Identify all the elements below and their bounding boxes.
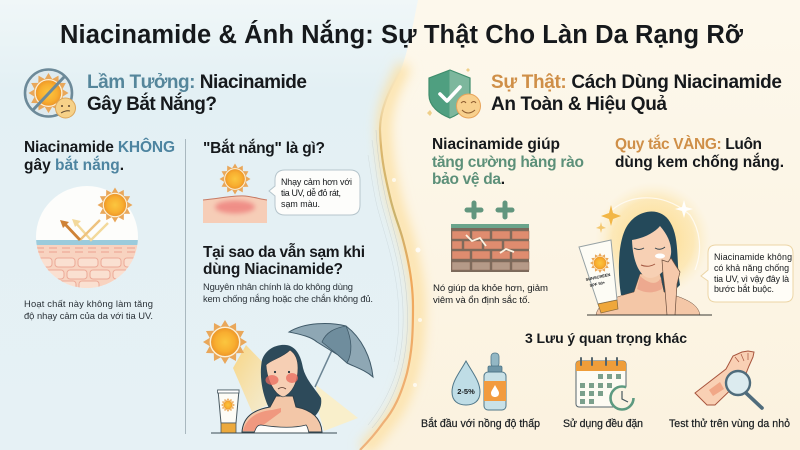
- text: cause: Nguyên nhân chính là do không dùng: [203, 281, 353, 292]
- panel: what is photosensitivity: [203, 139, 373, 433]
- text: explanation: [24, 298, 153, 321]
- icon: shield with smile: [427, 68, 480, 118]
- decorative golden wave divider: [360, 65, 422, 450]
- heading: why skin darkens: Tại sao da vẫn sạm khi: [203, 244, 365, 261]
- label: Bắt đầu với nồng độ thấp: [421, 417, 540, 430]
- text: cause: [203, 281, 373, 304]
- title: Niacinamide & Ánh Nắng: Sự Thật Cho Làn Da Rạng Rỡ: [60, 19, 744, 49]
- illustration: woman applying sunscreen: [579, 182, 712, 315]
- icon: drop and serum bottle: 2-5%: [457, 387, 475, 396]
- label: Test thử trên vùng da nhỏ: [669, 418, 790, 430]
- hand: [662, 258, 680, 315]
- illustration: sunburned woman with broken umbrella: [203, 320, 373, 433]
- truth heading: Sự Thật: Cách Dùng Niacinamide: [491, 72, 782, 93]
- face: [266, 350, 298, 397]
- umbrella: [289, 324, 373, 387]
- heading: why skin darkens: [203, 244, 365, 278]
- myth heading: [87, 72, 307, 115]
- callout: definition: sạm màu.: [281, 199, 320, 209]
- column divider: [184, 139, 186, 434]
- text: barrier benefit: Nó giúp da khỏe hơn, giảm: [433, 283, 548, 294]
- claim heading: Niacinamide KHÔNG: [24, 138, 175, 156]
- text: cause: kem chống nắng hoặc che chắn không đủ.: [203, 293, 373, 304]
- barrier heading: Niacinamide giúp: [432, 136, 560, 153]
- hair back: [261, 345, 321, 423]
- heading: "Bắt nắng" là gì?: [203, 139, 325, 157]
- barrier heading: tăng cường hàng rào: [432, 154, 584, 171]
- callout: definition: tia UV, dễ đỏ rát,: [281, 188, 341, 198]
- callout: definition: Nhạy cảm hơn với: [281, 177, 352, 187]
- heading: three notes: 3 Lưu ý quan trọng khác: [525, 330, 687, 346]
- myth heading: Gây Bắt Nắng?: [87, 93, 217, 115]
- golden rule heading: [615, 135, 784, 171]
- callout: sunscreen required: Niacinamide không: [714, 252, 792, 262]
- icon: calendar with clock: [576, 358, 634, 410]
- claim heading: gây bắt nắng.: [24, 156, 124, 174]
- text: explanation: Hoạt chất này không làm tăng: [24, 298, 153, 309]
- sunscreen tube: SUNSCREEN: [585, 272, 611, 282]
- icon: crossed-out sun with worried face: [25, 70, 76, 118]
- body: [596, 274, 700, 315]
- label: Sử dụng đều đặn: [563, 418, 643, 430]
- text: barrier benefit: viêm và ổn định sắc tố.: [433, 295, 530, 306]
- panel: truth: [421, 68, 793, 430]
- heading: why skin darkens: dùng Niacinamide?: [203, 261, 343, 278]
- callout: sunscreen required: có khả năng chống: [714, 263, 789, 273]
- text: explanation: độ nhạy cảm của da với tia UV.: [24, 310, 153, 321]
- callout: sunscreen required: tia UV, vì vậy đây là: [714, 274, 789, 284]
- body: [242, 396, 322, 432]
- golden rule heading: Quy tắc VÀNG: Luôn: [615, 135, 762, 153]
- truth heading: [491, 72, 782, 115]
- callout: definition: [269, 170, 360, 215]
- towel: [254, 425, 309, 433]
- hair: [619, 212, 680, 295]
- myth heading: Lầm Tưởng: Niacinamide: [87, 72, 307, 93]
- callout: sunscreen required: bước bắt buộc.: [714, 284, 774, 294]
- text: barrier benefit: [433, 283, 548, 306]
- truth heading: An Toàn & Hiệu Quả: [491, 94, 667, 115]
- claim heading: [24, 138, 175, 174]
- golden rule heading: dùng kem chống nắng.: [615, 153, 784, 171]
- background: pale blue left side: [0, 0, 418, 450]
- tip: use consistently: [563, 358, 643, 430]
- illustration: skin reflecting UV: [36, 186, 138, 288]
- illustration: brick barrier: [451, 203, 529, 272]
- sunscreen tube: [579, 240, 618, 313]
- sunscreen tube: SPF 50+: [589, 280, 606, 288]
- tip: patch test: [669, 351, 790, 430]
- callout: sunscreen required: [701, 245, 793, 302]
- tip: low concentration: [421, 353, 540, 430]
- barrier heading: [432, 136, 584, 188]
- icon: arm with magnifier: [695, 351, 762, 408]
- panel: myth: [24, 70, 307, 321]
- face: [632, 226, 671, 278]
- icon: sun over irritated skin: [203, 164, 267, 223]
- barrier heading: bảo vệ da.: [432, 171, 505, 188]
- sunscreen tube: [218, 390, 239, 433]
